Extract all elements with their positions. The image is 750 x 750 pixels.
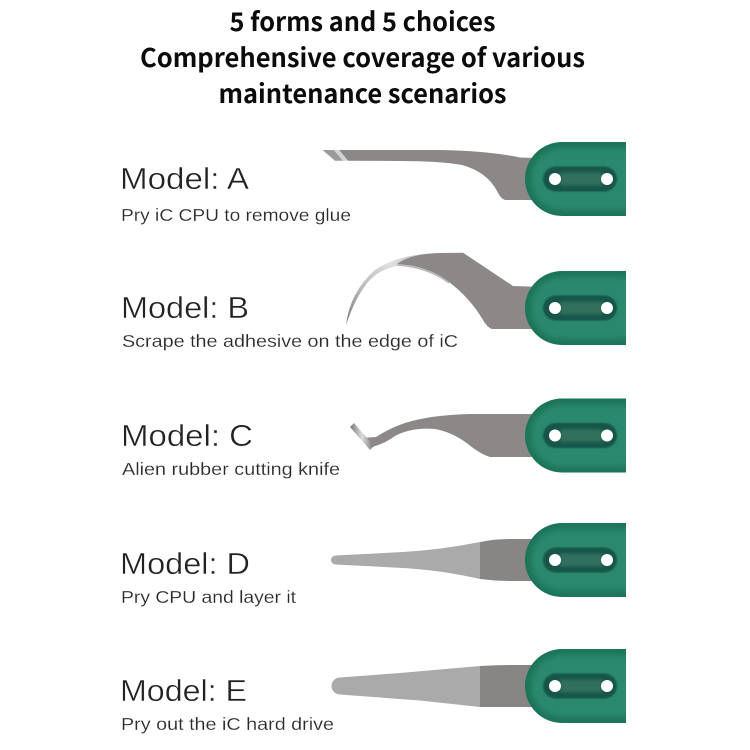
heading: model A: Model: A	[120, 161, 249, 196]
title	[140, 2, 585, 111]
icon: blade B	[346, 253, 535, 329]
icon: blade C	[350, 414, 535, 457]
description: model C: Alien rubber cutting knife	[122, 459, 340, 479]
icon: blade D	[331, 539, 535, 581]
heading: model C: Model: C	[121, 418, 253, 453]
icon: handle D	[525, 523, 626, 597]
icon: blade E	[332, 665, 535, 707]
icon: handle E	[525, 649, 626, 723]
description: model A: Pry iC CPU to remove glue	[121, 205, 351, 225]
panel: model E	[120, 649, 651, 734]
description: model E: Pry out the iC hard drive	[121, 714, 334, 734]
icon: blade A	[322, 150, 535, 200]
icon: handle B	[525, 271, 626, 345]
title: Comprehensive coverage of various	[140, 38, 585, 75]
title: 5 forms and 5 choices	[230, 2, 496, 39]
panel: model A	[120, 142, 651, 225]
title: maintenance scenarios	[218, 74, 506, 111]
description: model B: Scrape the adhesive on the edge of iC	[122, 331, 458, 351]
description: model D: Pry CPU and layer it	[121, 587, 296, 607]
heading: model D: Model: D	[120, 546, 250, 581]
panel: model B	[121, 253, 651, 351]
panel: model C	[121, 398, 651, 479]
heading: model E: Model: E	[120, 673, 247, 708]
panel: model D	[120, 523, 651, 607]
heading: model B: Model: B	[121, 290, 249, 325]
icon: handle C	[525, 398, 626, 472]
icon: handle A	[525, 142, 626, 216]
